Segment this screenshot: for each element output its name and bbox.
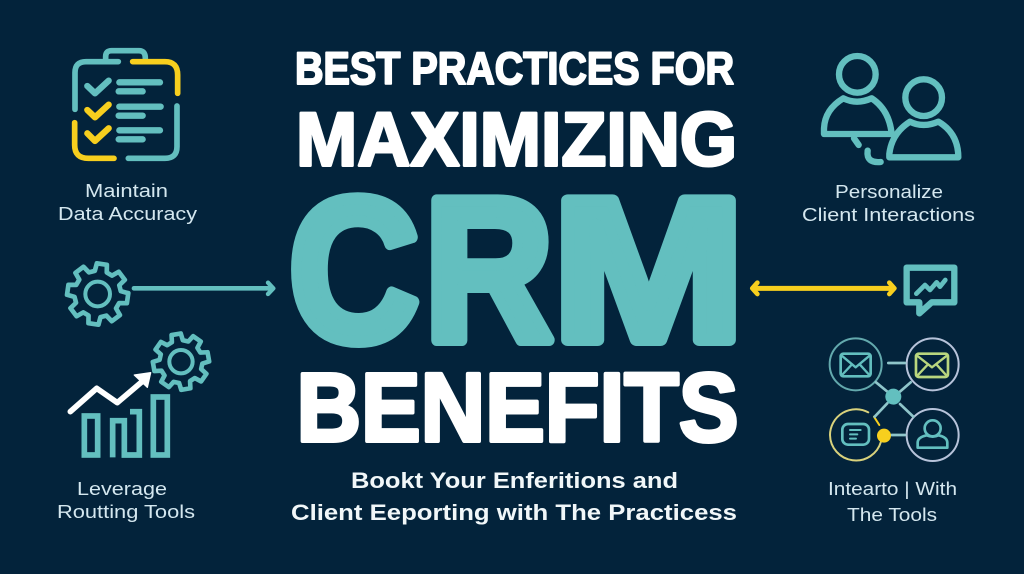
title line: maximizing: MAXIMIZING [296,98,737,182]
arrow: double-headed yellow [752,283,894,294]
icon: growth chart with gear [70,329,213,457]
label: personalize client interactions [802,182,975,225]
subtitle line 2: Client Eeporting with The Practicess [291,500,737,525]
label: maintain data accuracy [58,181,197,224]
icon: chat bubble with trend line [907,268,954,313]
title line: benefits: BENEFITS [296,353,738,462]
label: maintain data accuracy: Data Accuracy [58,204,197,224]
title line: CRM [289,157,744,384]
icon: two people [824,56,958,162]
label: integrate with the tools: Intearto | With [828,479,957,499]
label: integrate with the tools [828,479,957,525]
label: integrate with the tools: The Tools [847,505,937,525]
label: personalize client interactions: Personalize [835,182,943,202]
panel: maintain data accuracy [58,51,197,224]
title [289,43,744,462]
panel: integrate with the tools [828,338,959,525]
title line: CRM: C [289,157,419,384]
label: leverage routing tools: Leverage [77,479,167,499]
title line: CRM: R [425,157,553,384]
icon: checklist clipboard [75,51,178,158]
label: maintain data accuracy: Maintain [85,181,168,201]
title line: best practices for: BEST PRACTICES FOR [295,43,734,94]
icon: connected network [830,338,959,461]
subtitle line 1: Bookt Your Enferitions and [351,468,678,493]
label: leverage routing tools [57,479,195,522]
label: leverage routing tools: Routting Tools [57,502,195,522]
label: personalize client interactions: Client Interactions [802,205,975,225]
panel: leverage routing tools [57,329,213,522]
panel: personalize client interactions [802,56,975,225]
icon: gear with arrow pointing to CRM [64,260,273,328]
title line: CRM: M [552,157,744,384]
subtitle [291,468,737,525]
